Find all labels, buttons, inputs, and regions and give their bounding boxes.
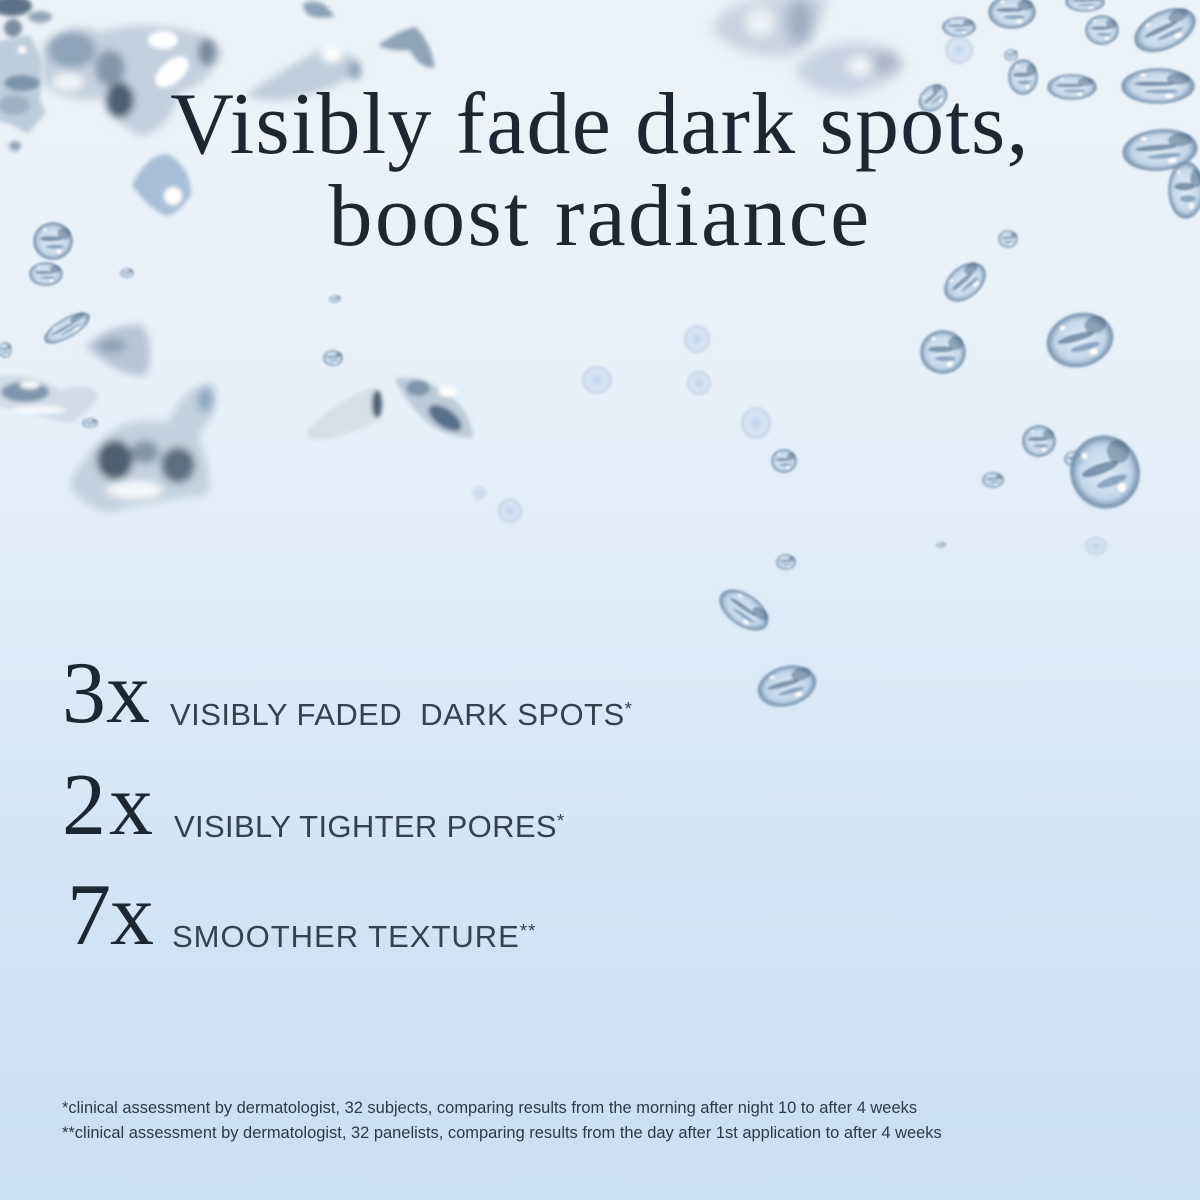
title: Visibly fade dark spots, xyxy=(170,76,1030,173)
stat: 3x dark spots: VISIBLY FADED DARK SPOTS* xyxy=(170,697,632,732)
droplet cluster: top left blurred xyxy=(0,0,222,151)
title xyxy=(170,76,1030,265)
droplet cluster: top centre left xyxy=(245,2,473,440)
droplet cluster: top right blurred xyxy=(712,0,905,95)
stat: 3x dark spots xyxy=(62,645,632,742)
stat: 2x pores: VISIBLY TIGHTER PORES* xyxy=(174,809,565,844)
stat: 7x texture: SMOOTHER TEXTURE** xyxy=(172,919,536,954)
stat: 7x texture: 7x xyxy=(67,867,153,964)
stat: 3x dark spots: 3x xyxy=(62,645,150,742)
footnotes: **clinical assessment by dermatologist, 32 panelists, comparing results from the day after 1st application to after 4 weeks xyxy=(62,1124,942,1142)
stat: 2x pores: 2x xyxy=(62,757,156,854)
stat: 2x pores xyxy=(62,757,565,854)
title: boost radiance xyxy=(329,168,871,265)
droplet cluster: right side xyxy=(712,254,1151,713)
droplet cluster: upper left xyxy=(0,154,216,512)
footnotes: *clinical assessment by dermatologist, 32 subjects, comparing results from the morning after night 10 to after 4 weeks xyxy=(62,1099,917,1117)
stat: 7x texture xyxy=(67,867,536,964)
footnotes xyxy=(62,1099,942,1142)
droplet cluster: top right sharp xyxy=(913,0,1200,248)
droplet cluster: centre soft xyxy=(472,324,772,524)
